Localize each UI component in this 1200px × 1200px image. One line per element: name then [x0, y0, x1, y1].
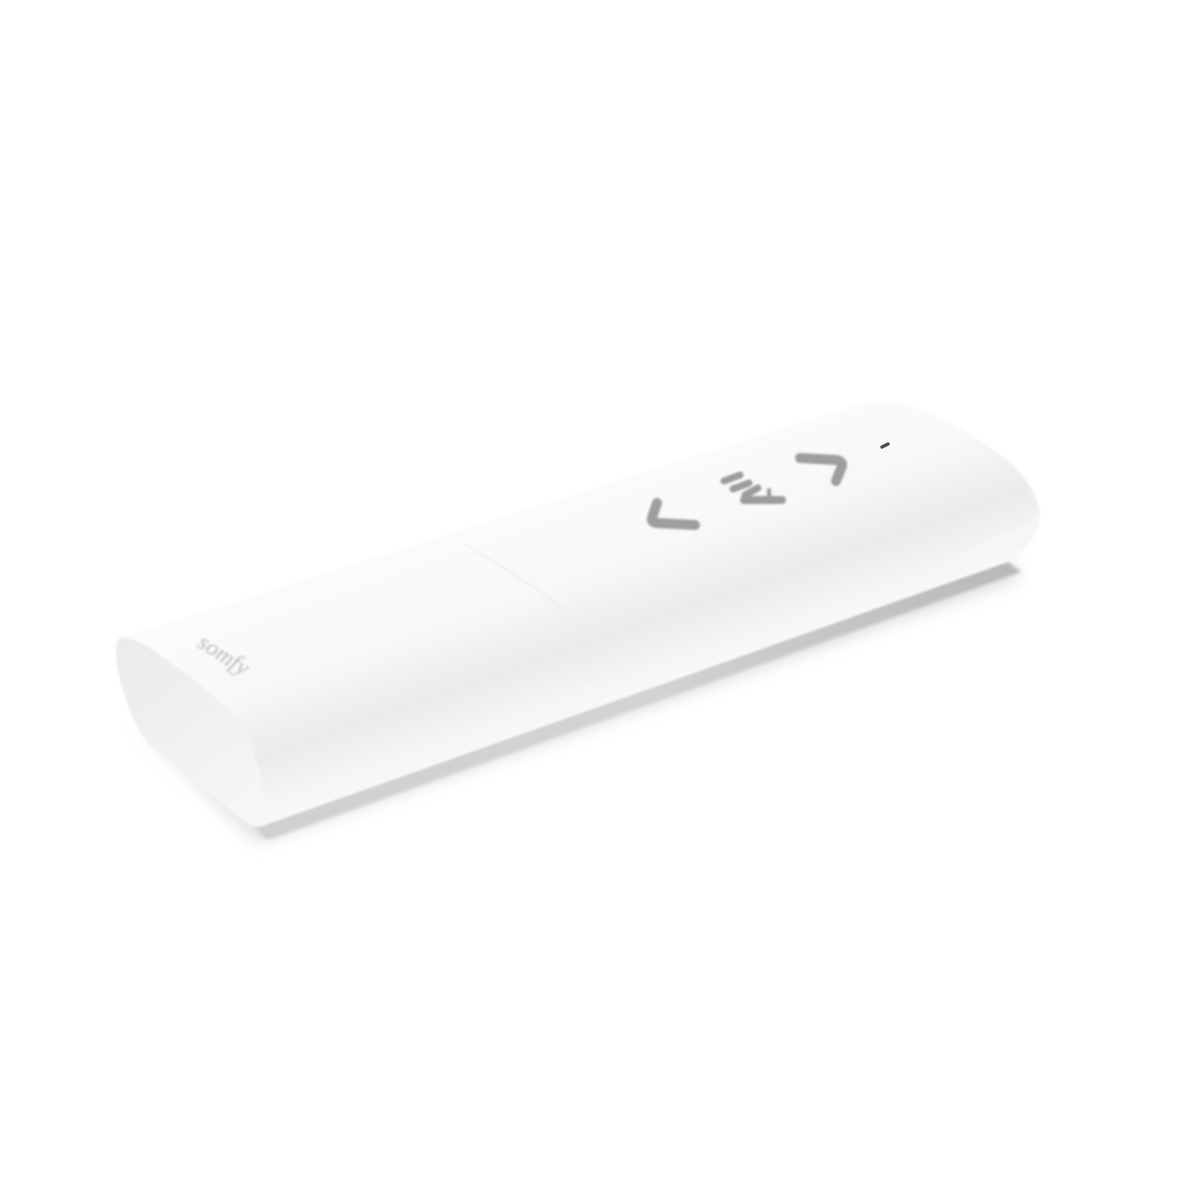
- brand logo: somfy: [193, 629, 254, 682]
- left end cap: [116, 638, 266, 827]
- remote body: [116, 401, 1040, 827]
- ground shadow: [130, 562, 1020, 842]
- status LED: [882, 444, 888, 447]
- seam between battery cover and body: [464, 544, 590, 684]
- button: my stop: [724, 475, 782, 500]
- underside dark strip: [252, 561, 1021, 839]
- button: down chevron: [652, 503, 695, 525]
- right end shading: [930, 512, 1040, 572]
- main casing: [116, 401, 1040, 827]
- control buttons: [652, 458, 842, 525]
- button: up chevron: [800, 458, 842, 481]
